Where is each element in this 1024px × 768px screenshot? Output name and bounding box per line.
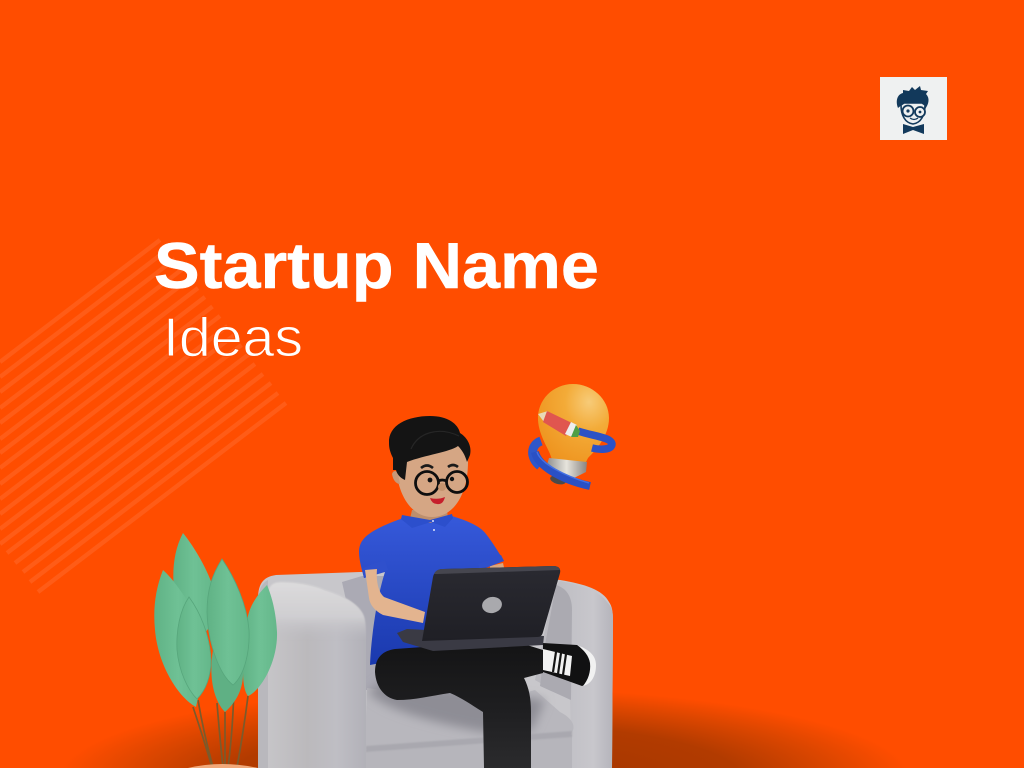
seat cushion: [365, 688, 574, 752]
arm behind laptop: [490, 563, 505, 574]
plant: [154, 533, 277, 768]
leaf back: [173, 533, 214, 633]
upper wire: [578, 431, 612, 449]
leaf lower: [211, 650, 243, 712]
hair: [389, 416, 471, 480]
glasses: [416, 472, 468, 494]
leaf front left: [177, 597, 211, 699]
chair back: [258, 572, 613, 768]
left arm: [285, 628, 366, 768]
subtitle: Ideas: [163, 306, 303, 368]
mouth: [430, 497, 445, 504]
floating lightbulb: [533, 384, 612, 486]
collar: [401, 514, 453, 528]
laptop lid: [422, 566, 560, 641]
seat base: [366, 735, 572, 768]
shirt: [359, 516, 504, 665]
leaf centre: [207, 559, 249, 685]
armchair: [258, 572, 613, 768]
floor shadow: [60, 688, 910, 768]
person: [359, 416, 596, 768]
left arm: [365, 569, 425, 623]
leaf right: [243, 585, 277, 696]
trousers: [375, 645, 543, 768]
bulb glass: [538, 384, 609, 466]
laptop: [397, 566, 560, 651]
laptop logo: [481, 595, 503, 615]
eyebrows: [421, 466, 433, 468]
title: Startup Name: [154, 229, 599, 302]
leaf far left: [154, 570, 202, 707]
face: [396, 442, 468, 517]
laptop base: [397, 629, 544, 651]
lower wire coil front: [535, 452, 590, 486]
nose: [438, 483, 446, 491]
stems: [193, 685, 248, 767]
neck: [410, 510, 448, 523]
shoe: [543, 643, 595, 686]
logo badge: [880, 77, 947, 140]
eyes: [428, 478, 432, 482]
right arm: [535, 581, 613, 768]
lower wire coil back: [533, 441, 541, 466]
screw base: [546, 458, 587, 478]
pencil: [538, 411, 580, 437]
pot: [188, 764, 258, 768]
